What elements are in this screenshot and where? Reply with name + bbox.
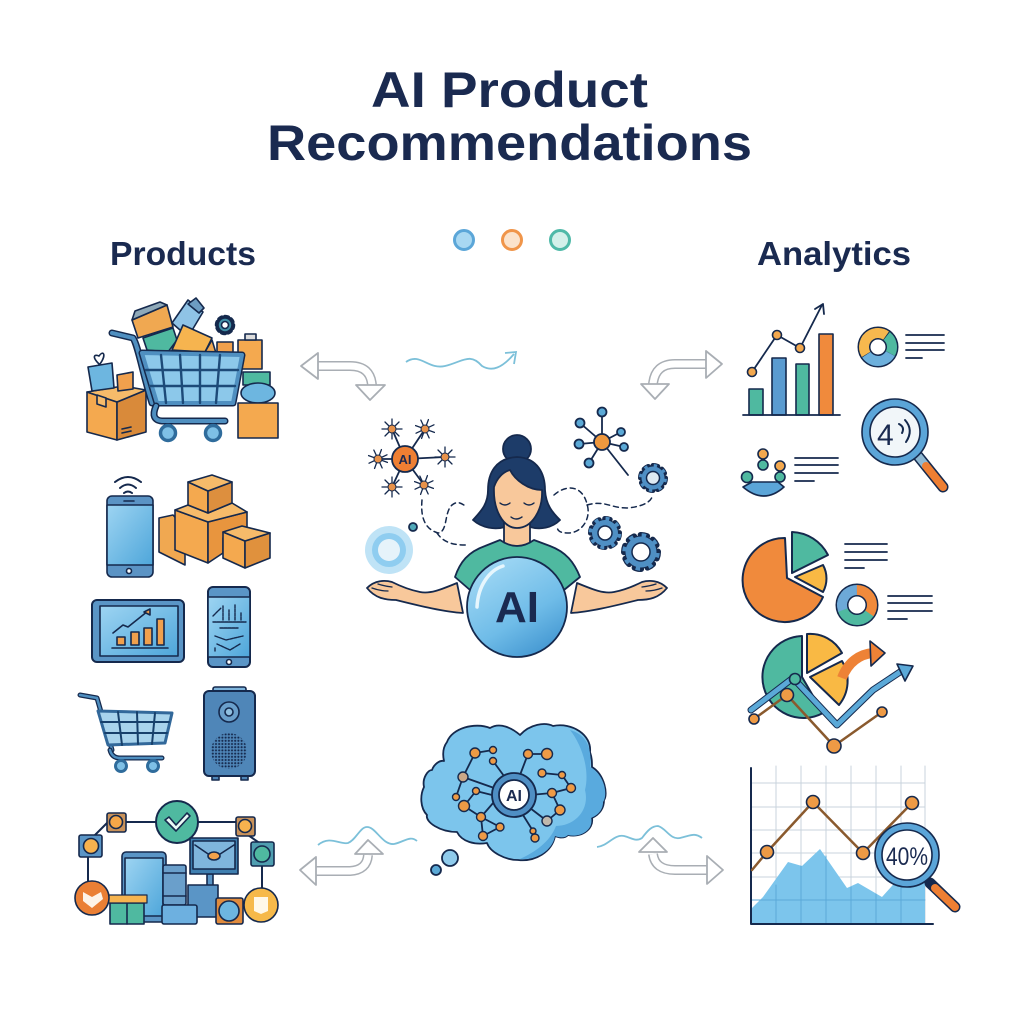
icon: cloud with AI network: AI: [506, 788, 522, 805]
panel: analytics: [742, 304, 955, 924]
chart: donut with legend lines: [858, 327, 944, 367]
arrow: bottom left wave: [318, 827, 417, 845]
icon: phone with analytics: [208, 587, 250, 667]
icon: stacked cardboard boxes: [159, 475, 270, 568]
title: Recommendations: [267, 115, 752, 171]
title: AI Product: [371, 62, 648, 118]
panel: center AI figure: [365, 408, 667, 657]
icon: glowing ring: [365, 526, 413, 574]
icon: smartphone with wifi: [107, 477, 153, 577]
panel: products: [75, 298, 278, 924]
arrow: bottom left double arrow: [300, 840, 383, 885]
icon: AI node network: [365, 416, 455, 498]
chart: exploded pie with legend: [743, 532, 887, 622]
arrow: top left double arrow: [301, 353, 385, 400]
icon: tablet with bar chart: [92, 600, 184, 662]
heading: analytics: Analytics: [757, 235, 911, 272]
chart: donut ring with legend: [836, 584, 932, 626]
arrow: top wave: [406, 352, 516, 369]
chart: line and area chart with magnifier: [751, 766, 955, 924]
icon: smart speaker: [204, 687, 255, 780]
icon: cloud with AI network: [421, 724, 606, 875]
chart: line and area chart with magnifier: 40%: [886, 843, 928, 871]
icon: magnifying glass: [862, 399, 943, 487]
heading: products: Products: [110, 235, 256, 272]
chart: pie with growth arrows: [749, 634, 913, 753]
arrow: top right double arrow: [641, 351, 722, 399]
AI sphere: [467, 557, 567, 657]
arrow: bottom right double arrow: [639, 838, 723, 884]
title: [267, 62, 752, 171]
icon: people with legend lines: [742, 449, 838, 496]
icon: blue node network: [574, 408, 628, 475]
small node: [409, 523, 417, 531]
chart: bars with trend line: [743, 304, 840, 415]
person: [367, 435, 667, 657]
decorative status dots: [454, 230, 570, 250]
icon: gears: [590, 466, 666, 569]
arrow: bottom right wave: [597, 826, 702, 847]
dashed connectors: [422, 488, 652, 545]
AI sphere: AI: [495, 583, 539, 632]
icon: shopping cart: [80, 695, 172, 772]
icon: magnifying glass: 4: [877, 419, 894, 452]
icon: full shopping cart with boxes: [87, 298, 278, 440]
icon: AI node network: AI: [398, 452, 412, 467]
icon: connected devices network: [75, 801, 278, 924]
